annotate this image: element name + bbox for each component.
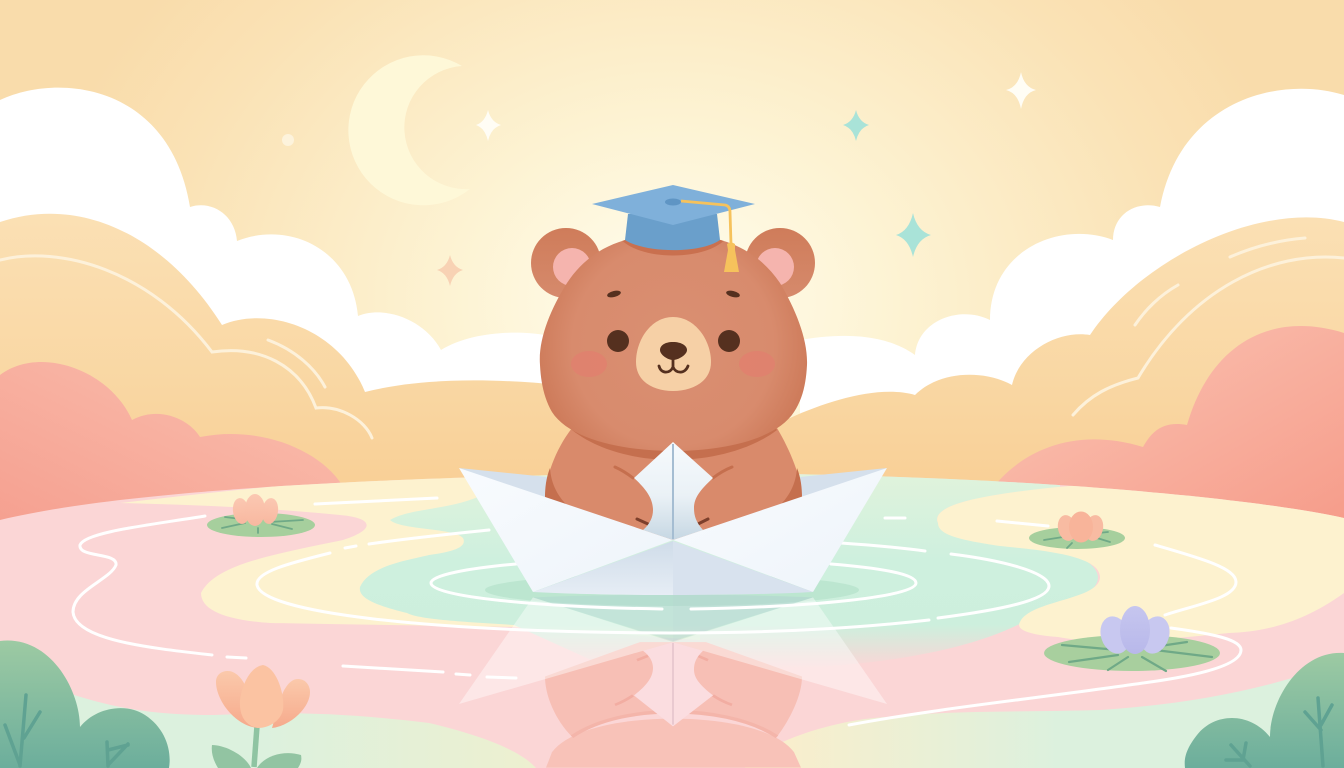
centre petal (1069, 512, 1093, 542)
reflected left panel (459, 597, 673, 704)
right cheek (739, 351, 775, 377)
tassel cord (681, 201, 731, 244)
branches (5, 695, 128, 766)
left inner ear (553, 248, 591, 286)
bear head (540, 234, 807, 451)
left leaf (212, 745, 251, 768)
cap button (665, 198, 681, 206)
bush bottom left (0, 641, 170, 768)
reflected lower right panel (673, 595, 813, 641)
left cheek (571, 351, 607, 377)
nose (660, 342, 687, 360)
reflection of bear and boat (459, 595, 887, 768)
reflected lower left panel (533, 595, 673, 641)
reflected sail (634, 642, 713, 726)
stars and sparkles (282, 72, 1036, 286)
reflected sail fold (672, 643, 674, 725)
veins (1062, 642, 1212, 671)
sail (634, 442, 713, 540)
bear ears (531, 228, 815, 298)
collar shadow (572, 420, 777, 460)
veins (1044, 532, 1110, 548)
crescent moon (348, 55, 470, 205)
paw marks (637, 519, 708, 524)
reflected head (546, 719, 801, 768)
water ripple lines (73, 498, 1241, 725)
left brow (606, 289, 622, 299)
orange hills right (670, 217, 1344, 520)
branches (1226, 698, 1332, 766)
left petal (1055, 513, 1079, 543)
mint water bottom right (745, 678, 1292, 768)
right petal (260, 497, 280, 525)
pad (1029, 527, 1125, 549)
left winding ripple (73, 516, 212, 655)
right inner ear (756, 248, 794, 286)
veins (222, 517, 303, 533)
cap shadow on head (622, 240, 724, 256)
small dot star (282, 134, 294, 146)
lily pad right large (1044, 606, 1220, 671)
right leaf (257, 753, 301, 768)
reflected body (545, 642, 802, 737)
cloud contour lines (0, 238, 1344, 438)
orange hills left (0, 214, 680, 520)
pink hill right (995, 326, 1344, 525)
left petal (231, 497, 251, 525)
cap board (592, 185, 755, 225)
muzzle (636, 317, 711, 391)
left ear (531, 228, 601, 298)
left side shading (545, 468, 572, 510)
bush bottom right (1185, 653, 1344, 768)
right petal (272, 679, 310, 728)
right side shading (775, 468, 802, 510)
right brow (725, 289, 741, 299)
white star right (1006, 72, 1036, 109)
lower right panel (673, 541, 813, 595)
white star left (476, 110, 501, 141)
yellow water right (937, 485, 1344, 641)
teal star (843, 110, 869, 141)
tulip (212, 665, 310, 768)
reflected right panel (673, 597, 887, 704)
lily pad left (207, 494, 315, 537)
reflected arm lines (615, 656, 732, 705)
white clouds left (0, 88, 545, 480)
reflected collar (572, 712, 777, 737)
left petal (1096, 613, 1134, 657)
left eye (607, 330, 629, 352)
cap base (625, 214, 720, 250)
right ripples (885, 516, 905, 520)
pad (207, 513, 315, 537)
boat shadow on water (485, 574, 859, 606)
sail fold (672, 444, 674, 539)
pond water (0, 470, 1344, 768)
mint water bottom left (74, 694, 536, 768)
paper boat front (459, 442, 887, 595)
yellow water left (120, 470, 700, 640)
centre petal (245, 494, 265, 526)
mint water centre (360, 470, 1098, 668)
torso (545, 428, 802, 540)
foliage (1185, 653, 1344, 768)
arm lines (615, 467, 732, 478)
left front panel (459, 468, 673, 592)
mouth (659, 358, 688, 372)
lower left panel (533, 541, 673, 595)
white clouds right (800, 89, 1344, 480)
pink hill left (0, 362, 342, 525)
right front panel (673, 468, 887, 592)
right petal (1136, 613, 1174, 657)
lily pad right small (1029, 512, 1125, 549)
middle ripple (369, 530, 489, 544)
bear face (571, 289, 775, 391)
tassel (724, 242, 739, 272)
pink water base (0, 470, 1344, 768)
peach star (437, 255, 463, 286)
graduation cap (592, 185, 755, 272)
right petal (1082, 513, 1106, 543)
inner ripple (431, 564, 662, 609)
lower dashes (343, 666, 443, 672)
bear body (545, 420, 802, 540)
pad (1044, 635, 1220, 671)
centre petal (1120, 606, 1150, 654)
stem (254, 726, 257, 767)
left petal (216, 671, 258, 728)
boat back panels (459, 468, 887, 540)
foliage (0, 641, 170, 768)
centre petal (240, 665, 283, 728)
teal large star (896, 213, 931, 257)
right eye (718, 330, 740, 352)
right ear (745, 228, 815, 298)
